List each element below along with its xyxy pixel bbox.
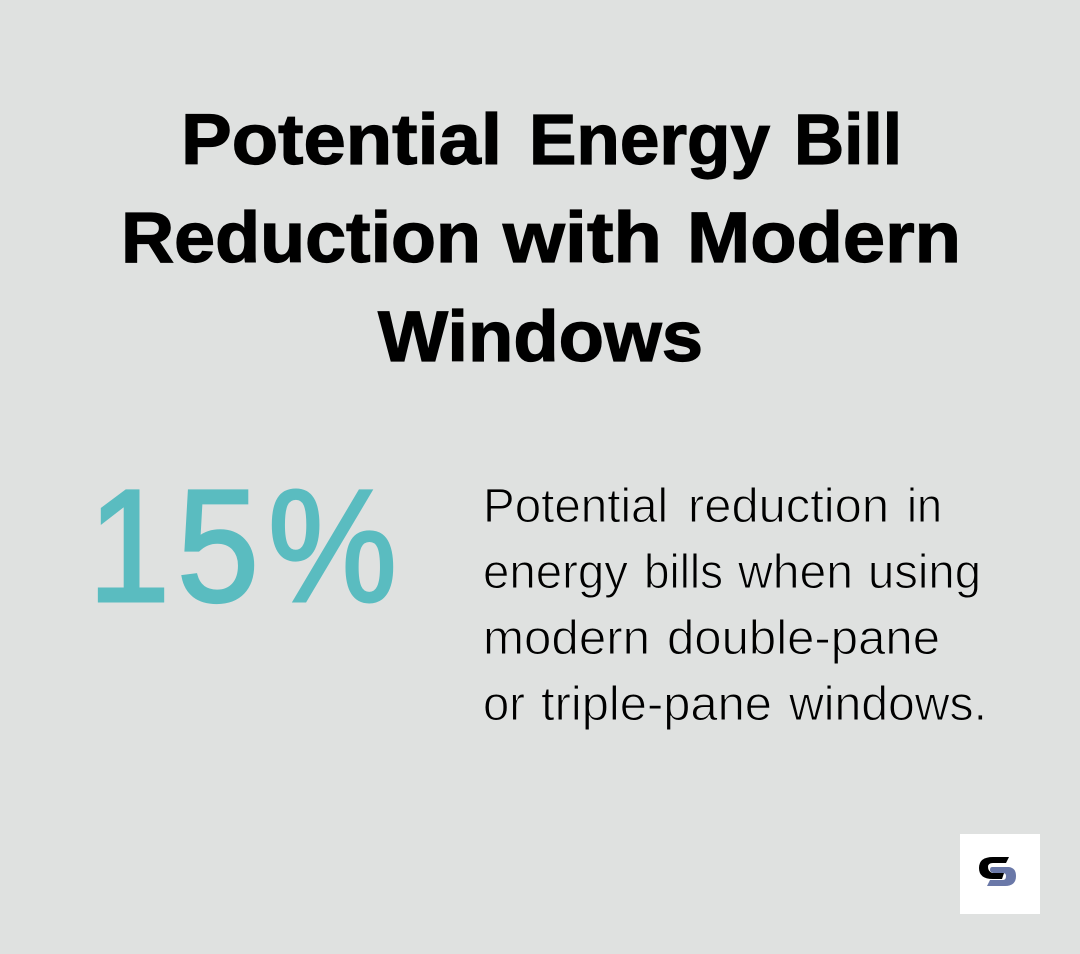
description text: double-pane <box>667 612 940 665</box>
big stat: 15%: 5 <box>177 456 259 635</box>
description text: triple-pane <box>541 678 772 731</box>
description text: Potential <box>483 480 668 533</box>
description text: modern <box>483 612 650 665</box>
description text: or <box>483 678 525 731</box>
title: with <box>502 199 662 278</box>
description text: windows. <box>788 678 987 731</box>
title: Energy <box>529 101 771 180</box>
title: Windows <box>378 298 703 377</box>
big stat: 15%: % <box>268 456 397 635</box>
logo badge <box>960 834 1040 914</box>
description text: energy <box>483 546 628 599</box>
description text: using <box>868 546 981 599</box>
icon: logo black C part <box>979 857 1009 879</box>
description text: when <box>737 546 853 599</box>
description text: bills <box>644 546 723 599</box>
title: Bill <box>794 101 902 180</box>
description text <box>483 480 987 731</box>
title: Potential <box>181 101 502 180</box>
big stat: 15%: 1 <box>88 456 170 635</box>
description text: reduction <box>688 480 889 533</box>
icon: logo blue S part <box>987 867 1016 886</box>
title <box>121 101 961 377</box>
title: Reduction <box>121 199 481 278</box>
big stat: 15% <box>88 456 397 635</box>
description text: in <box>907 480 942 533</box>
title: Modern <box>687 199 961 278</box>
